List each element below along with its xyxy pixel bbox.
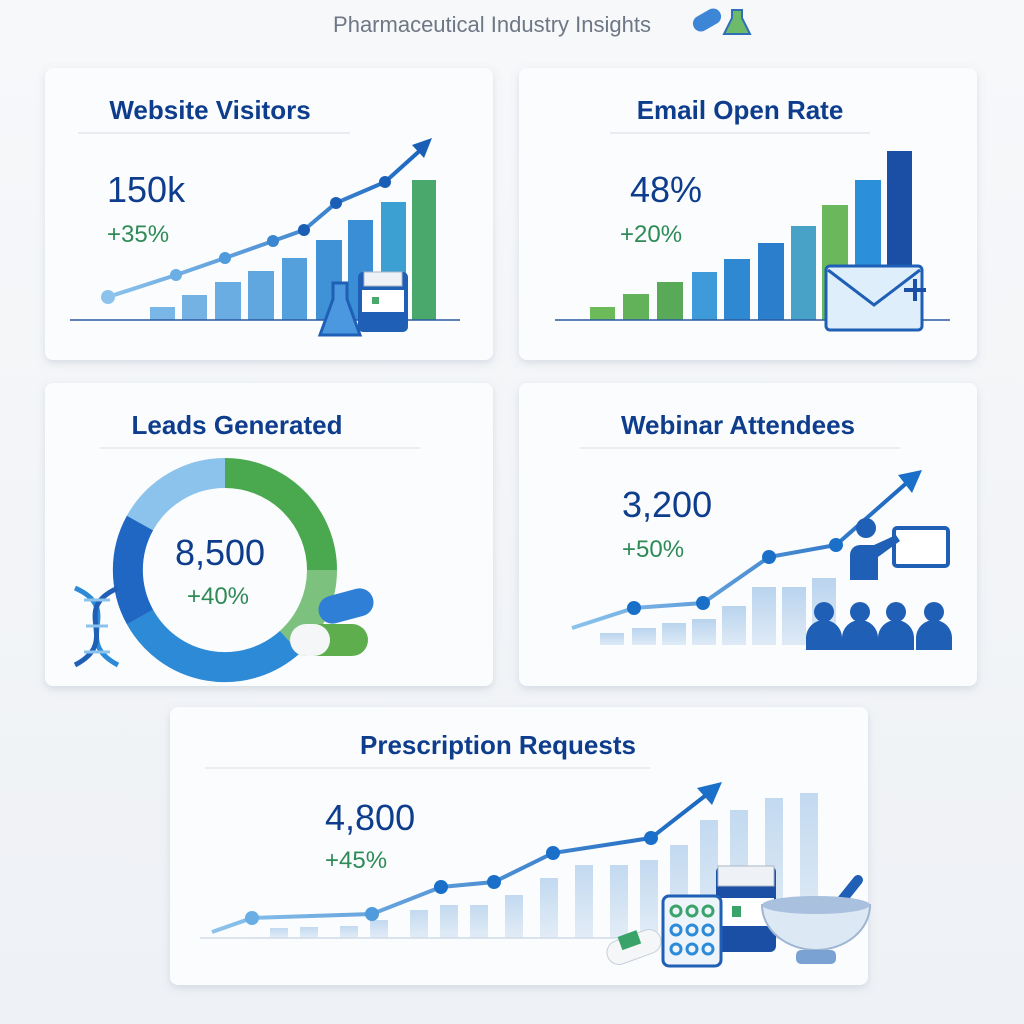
- icon: flask and jar: [320, 272, 408, 335]
- icon: envelope: [826, 266, 926, 330]
- panel: prescription requests: Prescription Requests: [360, 730, 636, 760]
- icon: capsules: [290, 585, 377, 656]
- panel: website visitors: +35%: [107, 221, 169, 248]
- icon: presenter: [806, 518, 952, 650]
- panel: leads generated: 8,500: [175, 532, 265, 573]
- icon: DNA: [75, 588, 118, 665]
- panel: email open rate: 48%: [630, 169, 702, 210]
- bar chart: [200, 793, 818, 938]
- bar chart: [600, 578, 836, 645]
- panel: email open rate: +20%: [620, 221, 682, 248]
- line trend arrow: [572, 470, 922, 628]
- panel: prescription requests: 4,800: [325, 797, 415, 838]
- panel: leads generated: Leads Generated: [132, 410, 342, 440]
- bar chart: [555, 151, 950, 320]
- line trend arrow: [101, 138, 432, 304]
- panel: leads generated: [45, 383, 493, 686]
- title: [333, 6, 750, 37]
- panel: email open rate: [519, 68, 977, 360]
- panel: webinar attendees: Webinar Attendees: [621, 410, 855, 440]
- icon: capsule and flask: [690, 6, 750, 34]
- panel: webinar attendees: 3,200: [622, 484, 712, 525]
- line trend arrow: [212, 782, 722, 932]
- panel: webinar attendees: +50%: [622, 536, 684, 563]
- panel: webinar attendees: [519, 383, 977, 686]
- title: Pharmaceutical Industry Insights: [333, 12, 651, 37]
- panel: prescription requests: +45%: [325, 847, 387, 874]
- panel: email open rate: Email Open Rate: [637, 95, 843, 125]
- heading: Website Visitors: [109, 95, 311, 125]
- value: 150k: [107, 169, 186, 210]
- donut chart: [128, 473, 322, 667]
- panel: website visitors: [45, 68, 493, 360]
- icon: pharmacy items: [604, 866, 870, 968]
- bar chart: [70, 180, 460, 320]
- panel: leads generated: +40%: [187, 583, 249, 610]
- panel: prescription requests: [170, 707, 870, 985]
